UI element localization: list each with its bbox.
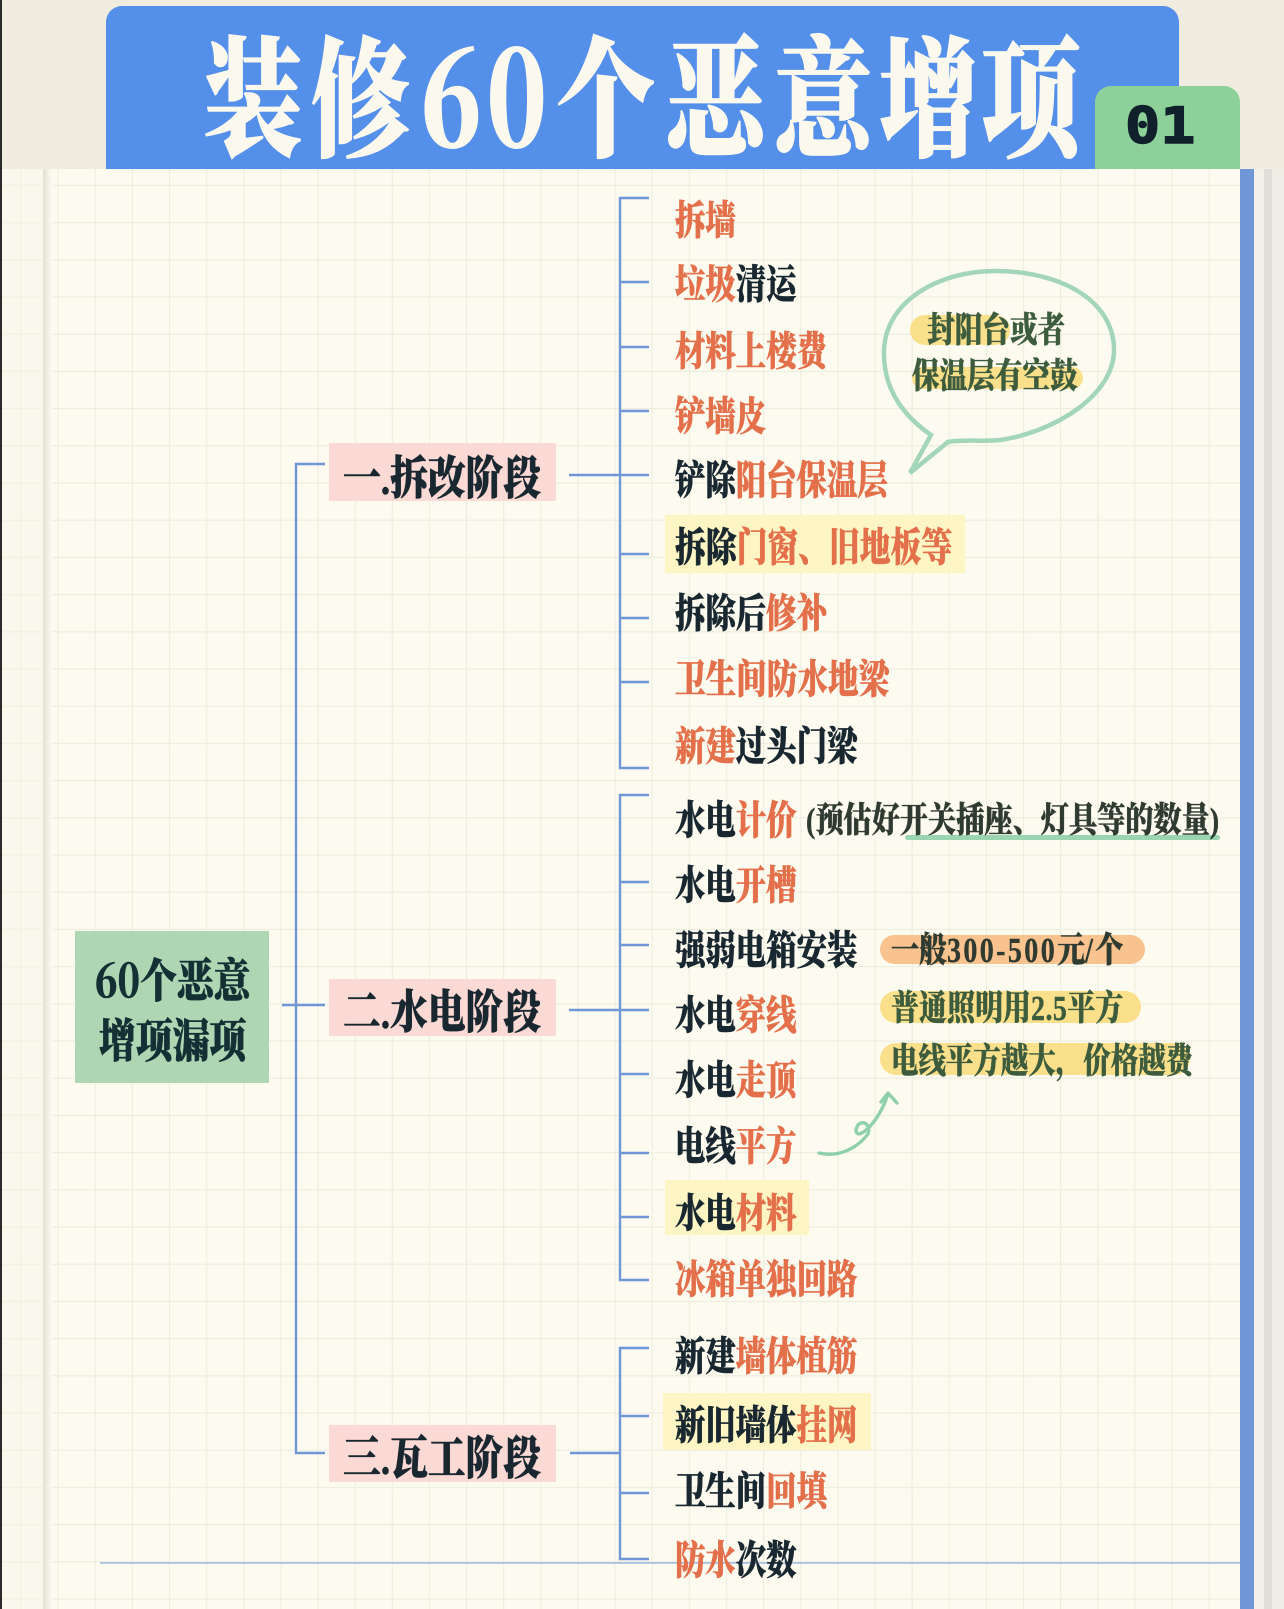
stage 2 item list: 水电穿线 [675,993,797,1038]
stage 3 label: 三.瓦工阶段 [343,1434,541,1485]
stage 2 item list: 强弱电箱安装 [675,928,857,973]
stage 1 item list: 拆除门窗、旧地板等 [675,525,952,570]
root node: 增项漏项 [99,1016,249,1068]
page tab 01: 01 [1125,96,1195,155]
stage 1 item list: 材料上楼费 [675,329,830,374]
root node: 60个恶意 [95,944,253,1010]
stage 1 item list: 垃圾清运 [675,262,800,307]
stage 1 item list: 铲除阳台保温层 [675,458,890,503]
stage 1 item list [675,198,952,769]
note: switch and lamp count: (预估好开关插座、灯具等的数量) [806,801,1219,840]
note: distribution box price: 一般300-500元/个 [891,931,1124,970]
stage 2 item list: 水电计价 [675,798,797,843]
stage 2 item list: 水电开槽 [675,863,797,908]
title: 装修60个恶意增项 [204,0,1086,184]
stage 2 item list: 水电材料 [675,1191,797,1236]
stage 1 item list: 拆墙 [675,198,736,243]
stage 3 item list: 新旧墙体挂网 [675,1403,857,1448]
note: wire price: 电线平方越大，价格越费 [891,1042,1195,1083]
highlight: item 水电材料 [665,1180,809,1235]
root node [75,931,269,1083]
highlight: item 拆除门窗 [665,515,965,573]
stage 2 item list: 水电走顶 [675,1058,799,1103]
stage 2 item list [675,798,858,1302]
bracket: stage 1 items [569,198,649,768]
bracket: stage 3 items [570,1348,649,1559]
stage 1 label: 一.拆改阶段 [343,454,541,505]
bracket: stage 2 items [569,795,649,1280]
stage 2 item list: 电线平方 [675,1124,797,1169]
icon: curly arrow [819,1093,897,1154]
note: lighting wire: 普通照明用2.5平方 [891,989,1123,1028]
connector: root to stages [282,464,325,1453]
stage 2 item list: 冰箱单独回路 [675,1257,858,1302]
stage 1 item list: 铲墙皮 [675,394,766,439]
stage 3 item list [675,1334,857,1583]
stage 3 item list: 防水次数 [675,1538,797,1583]
stage 1 item list: 卫生间防水地梁 [675,657,893,702]
stage 1 item list: 拆除后修补 [675,591,830,636]
page tab 01 [1095,86,1240,186]
speech bubble callout: 封阳台或者 [927,311,1065,350]
highlight: item 新旧墙体挂网 [663,1393,871,1450]
stage 3 item list: 卫生间回填 [675,1469,833,1514]
title banner [106,0,1179,186]
stage 2 label: 二.水电阶段 [343,988,541,1039]
speech bubble callout [884,271,1114,473]
stage 3 item list: 新建墙体植筋 [675,1334,857,1379]
speech bubble callout: 保温层有空鼓 [912,356,1078,396]
stage 1 item list: 新建过头门梁 [675,724,861,769]
